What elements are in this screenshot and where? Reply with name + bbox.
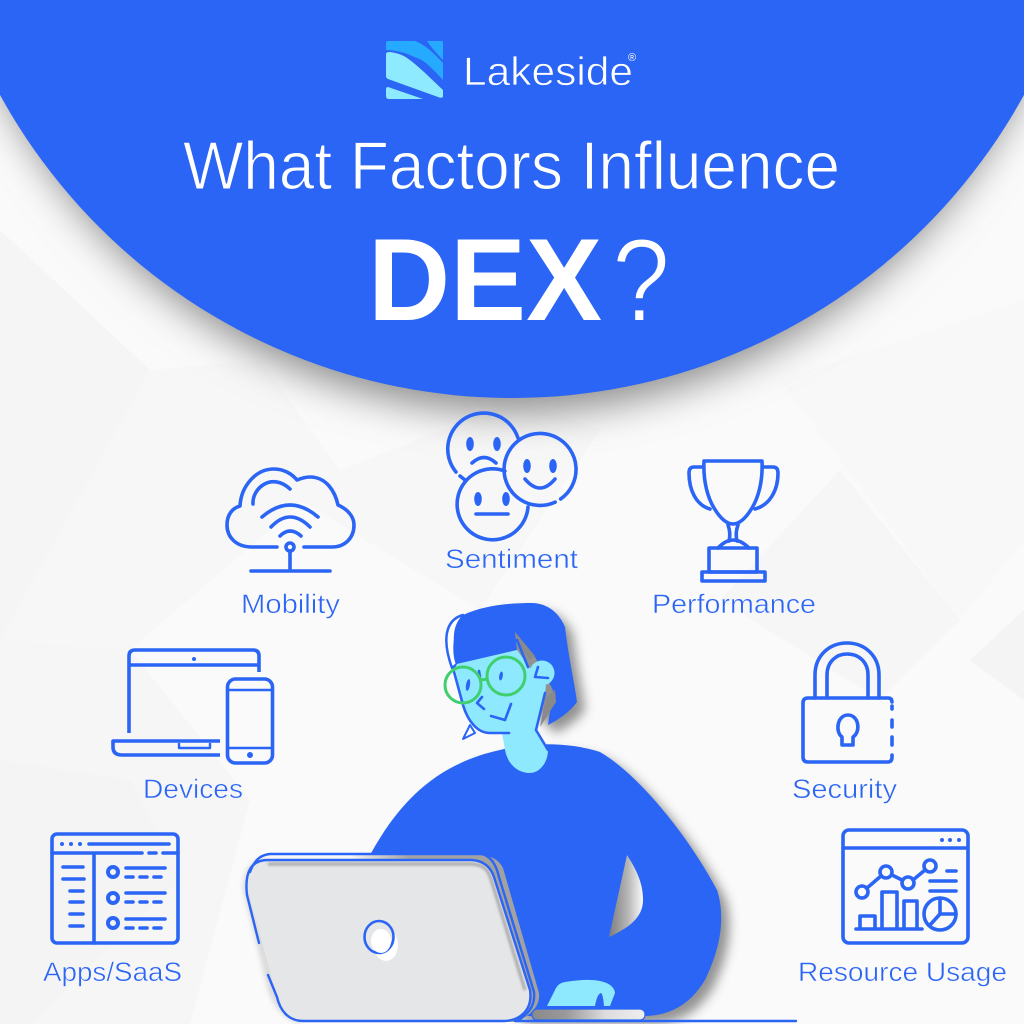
icon: apps window [52,834,178,943]
label: sentiment: Sentiment [445,544,579,574]
label: mobility: Mobility [241,589,341,619]
registered mark: ® [628,52,636,64]
icon: sentiment faces [448,413,576,540]
hair sliver [446,615,463,668]
glasses [445,657,525,703]
icon: security padlock [803,643,892,762]
laptop back [266,855,539,1022]
label: resource usage: Resource Usage [798,957,1007,987]
lid inner shading [268,864,525,990]
title line: What Factors Influence [183,128,840,204]
face and neck [455,650,548,773]
laptop shadow [243,858,300,1024]
icon: resource usage window [843,830,968,943]
label: security: Security [792,774,898,804]
hair [454,603,577,725]
title question mark: ? [612,215,670,347]
label: devices: Devices [143,774,243,804]
chin triangle [463,725,475,739]
logo mark [386,41,443,99]
keyboard [532,1009,645,1020]
hair gaps [515,632,535,660]
header blue circle [0,0,1024,398]
laptop logo [364,921,398,961]
icon: performance trophy [689,461,778,581]
body [370,744,721,1016]
logo [386,41,636,99]
laptop outline [246,854,534,1021]
ear [530,660,554,686]
face lines [453,640,548,750]
illustration: person with laptop [243,603,796,1024]
icon: mobility cloud [227,469,354,571]
arm gap [609,855,643,937]
label: performance: Performance [652,589,816,619]
logo wordmark: Lakeside [463,50,633,94]
icon: devices [113,650,272,763]
header circle shadow [0,0,1024,412]
eyes [465,671,504,691]
neck gap [540,690,556,727]
person shadow [378,611,729,1024]
laptop lid [246,861,530,1021]
title DEX: DEX [368,214,602,345]
desk line [515,1020,796,1022]
label: apps/saas: Apps/SaaS [43,957,182,987]
hand [547,980,615,1006]
